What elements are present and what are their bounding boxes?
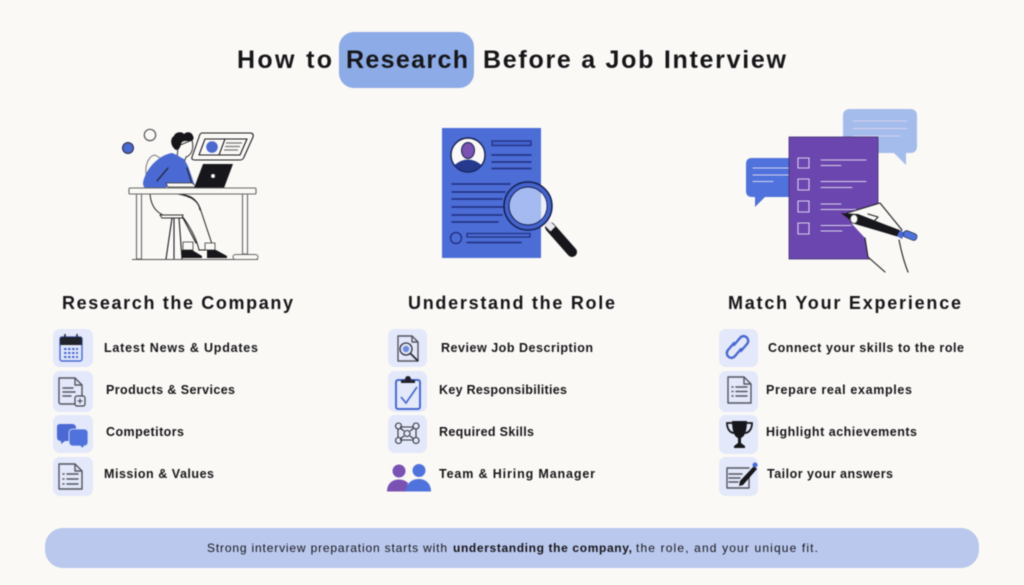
illustration: person working at desk [122, 129, 258, 260]
item: required skills [388, 415, 534, 453]
item: mission: Mission & Values [104, 467, 214, 481]
item: required skills: Required Skills [439, 425, 534, 439]
heading: Research the Company [62, 293, 293, 313]
icon: document magnifier [398, 336, 418, 361]
icon: chain link [727, 336, 748, 358]
panel: understand the role [387, 293, 615, 492]
item: products [53, 371, 235, 412]
item: real examples: Prepare real examples [766, 383, 912, 397]
icon: clipboard check [396, 376, 420, 409]
item: team and hiring manager [387, 464, 595, 492]
footer banner: understanding the company, [453, 541, 632, 555]
item: achievements: Highlight achievements [766, 425, 917, 439]
illustration: checklist with chat bubbles and pen [746, 109, 918, 272]
item: latest news [53, 329, 258, 367]
icon: network nodes [396, 423, 419, 444]
illustration: resume under magnifying glass [442, 128, 572, 258]
item: latest news: Latest News & Updates [104, 341, 258, 355]
panel: match your experience [719, 293, 964, 496]
title: How to [237, 46, 332, 74]
item: tailor answers [719, 457, 893, 496]
item: connect skills [719, 329, 964, 367]
panel: research the company [53, 293, 293, 496]
item: tailor answers: Tailor your answers [767, 467, 893, 481]
item: competitors [53, 415, 184, 453]
item: competitors: Competitors [106, 425, 184, 439]
title [237, 32, 787, 88]
footer banner [45, 528, 979, 568]
item: connect skills: Connect your skills to the role [768, 341, 964, 355]
heading: Match Your Experience [728, 293, 961, 313]
item: key responsibilities: Key Responsibilities [439, 383, 567, 397]
icon: list document [728, 377, 751, 403]
item: review job description: Review Job Description [441, 341, 593, 355]
icon: note with pen [727, 462, 758, 488]
icon: list document [59, 464, 82, 489]
footer banner: the role, and your unique fit. [636, 541, 818, 555]
title: Research [346, 46, 468, 74]
item: key responsibilities [388, 371, 567, 412]
footer banner: Strong interview preparation starts with [207, 541, 447, 555]
item: mission [53, 457, 214, 496]
icon: chat bubbles [57, 424, 88, 448]
item: achievements [719, 415, 917, 454]
item: products: Products & Services [106, 383, 235, 397]
icon: calendar [60, 334, 82, 361]
title highlight [339, 32, 474, 88]
heading: Understand the Role [408, 293, 615, 313]
icon: two people [387, 464, 431, 492]
item: review job description [388, 329, 593, 367]
item: team and hiring manager: Team & Hiring Manager [439, 467, 595, 481]
icon: document plus [59, 378, 85, 406]
icon: trophy [727, 421, 752, 448]
title: Before a Job Interview [483, 46, 787, 74]
item: real examples [719, 371, 912, 412]
